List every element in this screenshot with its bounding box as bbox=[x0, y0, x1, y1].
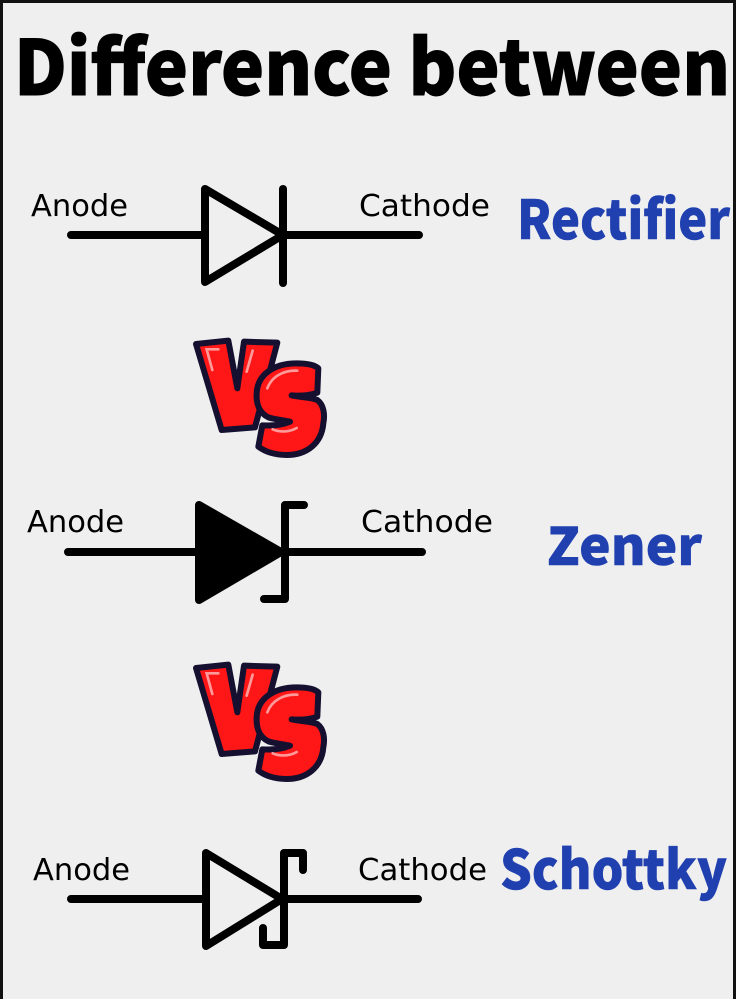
label: schottky anode: Anode bbox=[33, 853, 130, 888]
label: schottky cathode: Cathode bbox=[358, 853, 487, 888]
label: zener cathode: Cathode bbox=[361, 505, 493, 540]
schottky diode row bbox=[33, 826, 727, 946]
icon: second VS badge bbox=[196, 665, 324, 779]
label: rectifier cathode: Cathode bbox=[359, 189, 490, 224]
label: zener anode: Anode bbox=[27, 505, 124, 540]
label: rectifier anode: Anode bbox=[31, 189, 128, 224]
icon: rectifier diode symbol bbox=[71, 189, 419, 283]
rectifier diode row bbox=[31, 176, 731, 283]
zener diode row bbox=[27, 505, 703, 600]
heading: zener: Zener bbox=[547, 505, 703, 580]
icon: zener diode symbol bbox=[68, 505, 422, 600]
icon: first VS badge bbox=[196, 341, 324, 455]
icon: schottky diode symbol bbox=[71, 853, 418, 946]
